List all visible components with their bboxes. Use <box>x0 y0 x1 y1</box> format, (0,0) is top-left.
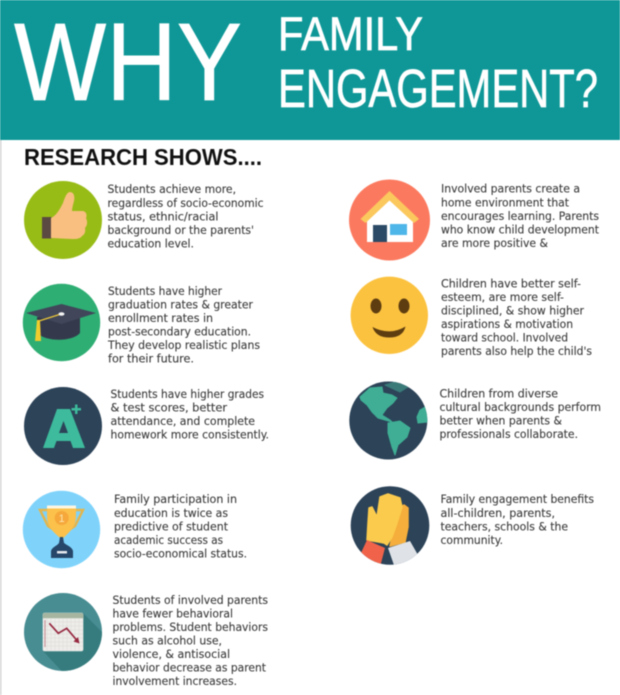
panel: everyone benefits <box>351 486 594 568</box>
text: family participation: socio-economical status. <box>114 548 247 560</box>
text: grades and attendance: homework more consistently. <box>110 428 269 442</box>
text: graduation rates: Students have higher <box>108 285 222 298</box>
text: home environment: encourages learning. Parents <box>441 210 599 223</box>
text: graduation rates: for their future. <box>108 352 194 366</box>
text: students achieve more: regardless of socio-economic <box>108 197 264 210</box>
panel: grades <box>24 387 269 465</box>
text: grades and attendance: & test scores, better <box>110 402 227 414</box>
text: grades and attendance: attendance, and complete <box>110 415 255 428</box>
text: family participation <box>114 493 247 560</box>
text: self-esteem: esteem, are more self- <box>441 291 564 304</box>
panel: home environment <box>349 180 600 260</box>
text: students achieve more: Students achieve more, <box>108 183 236 196</box>
text: graduation rates: enrollment rates in <box>108 312 213 325</box>
text: self-esteem: Children have better self- <box>441 278 581 291</box>
text: home environment: home environment that <box>441 196 570 209</box>
text: home environment: are more positive & <box>441 237 548 250</box>
panel: behavior <box>24 593 268 688</box>
text: self-esteem <box>441 278 592 358</box>
text: students achieve more: education level. <box>108 238 194 250</box>
text: grades and attendance <box>110 388 269 442</box>
text: diverse backgrounds: cultural backgrounds perform <box>440 401 601 414</box>
panel: participation <box>23 491 247 568</box>
text: students achieve more: status, ethnic/racial <box>108 210 218 224</box>
icon: trophy: 1 <box>59 513 65 525</box>
icon: smiley face <box>351 277 428 354</box>
text: family participation: academic success as <box>114 534 223 547</box>
icon: A plus grade <box>24 387 102 465</box>
text: grades and attendance: Students have higher grades <box>110 388 264 401</box>
text: fewer behavioral problems <box>112 594 268 688</box>
text: students achieve more: background or the parents' <box>108 224 254 237</box>
title: FAMILY: FAMILY <box>278 7 423 60</box>
text: self-esteem: disciplined, & show higher <box>441 305 584 318</box>
icon: graduation cap <box>23 284 100 361</box>
icon: thumbs up <box>24 181 102 259</box>
text: graduation rates: post-secondary education. <box>108 326 251 338</box>
text: fewer behavioral problems: involvement increases. <box>112 675 237 688</box>
icon: house <box>349 180 430 260</box>
text: fewer behavioral problems: problems. Student behaviors <box>112 621 268 634</box>
icon: trophy <box>23 491 100 568</box>
heading: research shows: RESEARCH SHOWS.... <box>24 144 262 170</box>
panel: diverse backgrounds <box>349 382 601 460</box>
icon: globe <box>349 382 428 460</box>
text: graduation rates: graduation rates & greater <box>108 298 253 312</box>
panel: graduation <box>23 284 260 366</box>
title: WHY: WHY <box>14 1 242 124</box>
text: family engagement benefits: Family engagement benefits <box>440 493 594 506</box>
text: self-esteem: parents also help the child's <box>441 345 592 358</box>
text: fewer behavioral problems: have fewer behavioral <box>112 608 233 620</box>
panel: achievement <box>24 181 264 259</box>
text: students achieve more <box>108 183 264 250</box>
icon: high five <box>351 486 429 568</box>
header banner <box>0 0 620 140</box>
text: diverse backgrounds: professionals collaborate. <box>440 428 578 441</box>
text: graduation rates <box>107 285 260 366</box>
text: family engagement benefits <box>440 493 594 547</box>
text: family engagement benefits: community. <box>440 534 503 547</box>
text: family engagement benefits: teachers, schools & the <box>440 520 568 534</box>
text: fewer behavioral problems: violence, & antisocial <box>112 648 230 661</box>
text: family engagement benefits: all-children, parents, <box>440 507 555 520</box>
text: graduation rates: They develop realistic plans <box>107 339 260 352</box>
text: home environment: who know child development <box>441 224 600 236</box>
text: home environment: Involved parents create a <box>441 183 580 196</box>
text: fewer behavioral problems: behavior decrease as parent <box>112 662 267 674</box>
text: fewer behavioral problems: Students of involved parents <box>112 594 268 607</box>
text: diverse backgrounds: Children from diverse <box>440 388 558 401</box>
panel: self-esteem <box>351 277 592 358</box>
text: family participation: predictive of student <box>114 520 229 534</box>
icon: declining chart <box>23 592 103 672</box>
text: family participation: Family participation in <box>114 493 237 506</box>
text: diverse backgrounds: better when parents & <box>440 415 562 428</box>
text: fewer behavioral problems: such as alcohol use, <box>112 634 222 648</box>
text: home environment <box>441 183 600 250</box>
text: self-esteem: toward school. Involved <box>441 332 568 345</box>
text: family participation: education is twice as <box>114 507 228 520</box>
text: diverse backgrounds <box>440 388 601 441</box>
text: self-esteem: aspirations & motivation <box>441 318 573 331</box>
